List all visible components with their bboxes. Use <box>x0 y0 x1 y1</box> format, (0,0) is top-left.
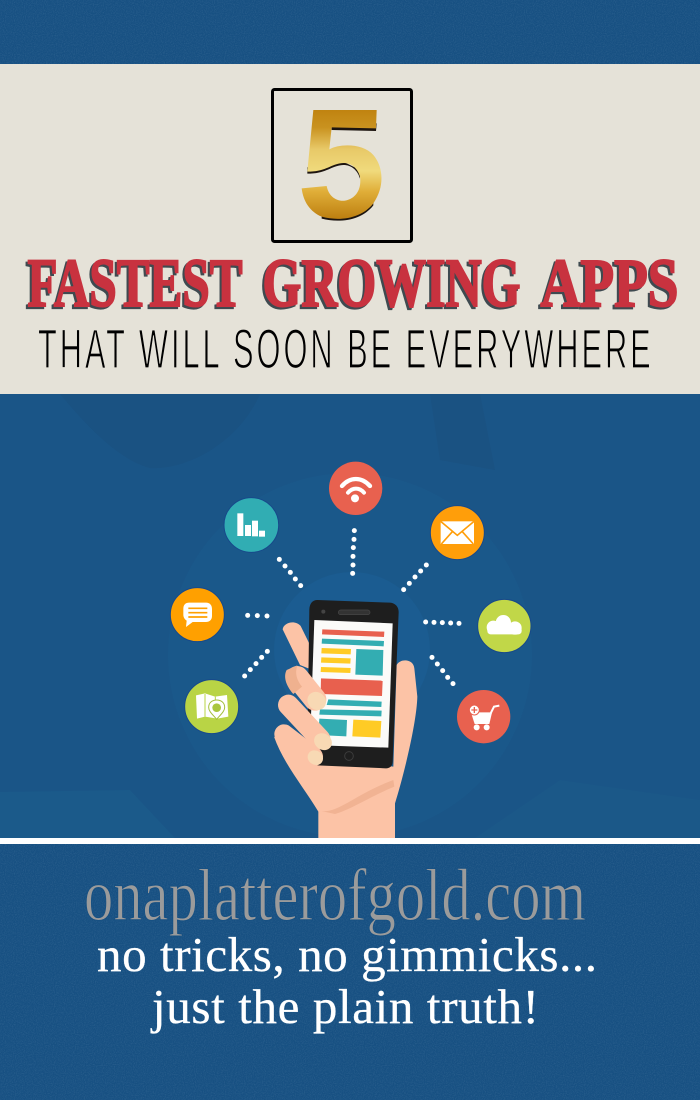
top blue band <box>0 0 700 64</box>
fingers <box>284 665 335 768</box>
icon: bar chart <box>224 498 279 552</box>
heading: fastest growing apps: FASTEST <box>26 247 240 323</box>
icon: cloud <box>478 599 531 653</box>
subheading: THAT WILL SOON BE EVERYWHERE <box>38 317 651 380</box>
heading: fastest growing apps: GROWING <box>260 247 518 323</box>
heading: fastest growing apps <box>26 245 678 323</box>
tagline line one: no tricks, no gimmicks... <box>97 927 597 982</box>
heading: fastest growing apps: GROWING <box>262 245 520 321</box>
website name: onaplatterofgold.com <box>84 855 586 937</box>
divider <box>0 838 700 844</box>
tagline line two: just the plain truth! <box>150 979 539 1034</box>
panel: illustration background <box>0 394 700 838</box>
icon: chat bubble <box>170 588 224 642</box>
icon: shopping cart <box>457 690 510 743</box>
phone <box>307 600 399 768</box>
icon: map <box>185 680 239 734</box>
panel: footer <box>0 844 700 1100</box>
panel: title <box>0 64 700 394</box>
framed number five <box>272 90 412 242</box>
icon: envelope <box>430 506 484 560</box>
hand palm and index finger <box>274 622 417 838</box>
heading: fastest growing apps: FASTEST <box>28 245 242 321</box>
illustration: hand holding phone <box>274 600 417 838</box>
icon: wifi <box>329 462 382 515</box>
dotted connectors <box>242 528 461 686</box>
